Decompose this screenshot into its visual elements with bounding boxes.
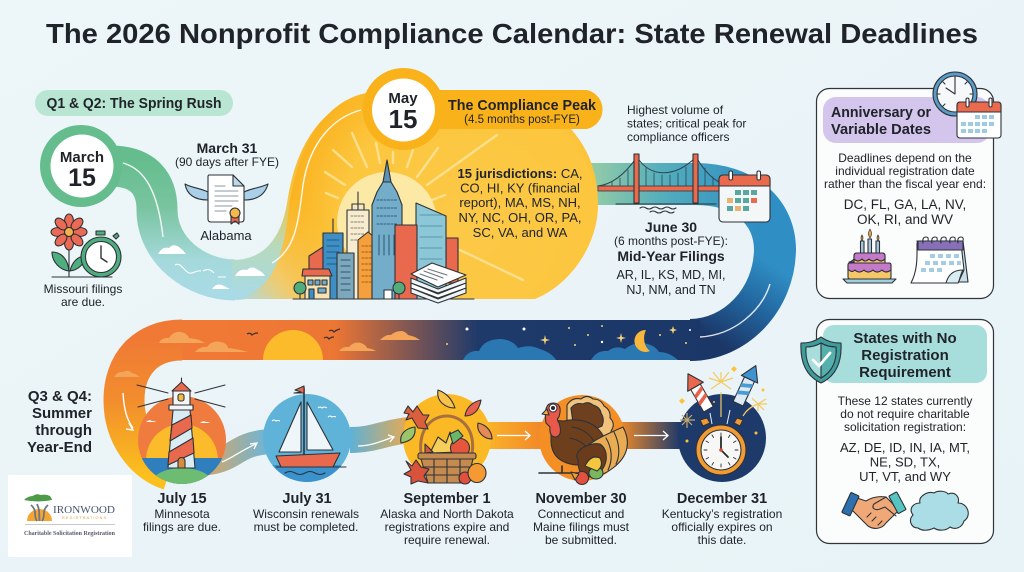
section label: Q1 and Q2 — [35, 90, 233, 116]
label: September 1 — [380, 491, 514, 547]
sun on horizon — [263, 330, 323, 360]
ribbon highlights — [123, 284, 770, 430]
illustration: new year clock and fireworks — [678, 362, 767, 482]
label: July 31: July 31 — [282, 491, 332, 507]
date badge: March 15: March — [60, 149, 104, 166]
panel heading: no registration: Requirement — [859, 364, 951, 381]
ribbon: June teal to blue — [585, 184, 775, 250]
label: November 30: Connecticut and — [538, 507, 624, 521]
connector: sailboat to basket — [350, 430, 410, 446]
text: 15 jurisdictions: CO, HI, KY (financial — [460, 180, 580, 196]
text: June 30 mid-year filings: Mid-Year Filings — [617, 248, 725, 264]
logo: Ironwood Registrations: IRONWOOD — [53, 504, 115, 516]
state list: variable dates: DC, FL, GA, LA, NV, — [844, 197, 966, 212]
icon: flower and stopwatch — [51, 214, 121, 277]
date badge: March 15 — [40, 125, 122, 207]
ribbon: left curve into lighthouse — [124, 340, 182, 470]
panel heading: no registration: States with No — [853, 330, 957, 347]
label: July 31: must be completed. — [254, 520, 358, 534]
label: November 30: November 30 — [535, 491, 627, 507]
text: 15 jurisdictions — [458, 166, 582, 240]
state list: no registration: UT, VT, and WY — [859, 469, 951, 484]
state list: variable dates: OK, RI, and WV — [857, 212, 953, 227]
icon: handshake — [842, 492, 906, 528]
peak heading pill: (4.5 months post-FYE) — [464, 114, 580, 126]
label: July 15: Minnesota — [154, 507, 210, 521]
logo: Ironwood Registrations: REGISTRATIONS — [62, 516, 106, 520]
body text: deadlines: individual registration date — [835, 164, 975, 178]
illustration: city skyline — [293, 160, 474, 303]
label: December 31: this date. — [698, 533, 746, 547]
text: highest volume note — [627, 103, 746, 144]
illustration: sailboat — [263, 386, 351, 482]
body text: deadlines — [824, 151, 986, 191]
body text: deadlines: rather than the fiscal year end: — [824, 177, 986, 191]
section label: Q3 and Q4: Q3 & Q4: — [28, 388, 92, 405]
illustration: golden gate bridge — [598, 154, 725, 213]
logo: Ironwood Registrations — [8, 475, 132, 557]
text: 15 jurisdictions: 15 jurisdictions: CA, — [458, 166, 582, 181]
panel heading: anniversary — [823, 97, 990, 143]
body text: no registration — [838, 394, 972, 434]
label: July 15: July 15 — [157, 491, 207, 507]
icon: flip calendar — [911, 237, 968, 283]
ribbon: day to night band — [175, 320, 700, 360]
label: December 31: Kentucky’s registration — [662, 507, 782, 521]
section label: Q3 and Q4 — [27, 388, 92, 456]
text: June 30 mid-year filings: AR, IL, KS, MD, MI, — [616, 268, 726, 282]
peak heading pill: The Compliance Peak — [448, 97, 597, 114]
panel heading: anniversary: Variable Dates — [831, 121, 931, 138]
label: September 1: registrations expire and — [385, 520, 509, 534]
text: 15 jurisdictions: NY, NC, OH, OR, PA, — [458, 210, 582, 225]
date badge: May 15: May — [388, 90, 418, 107]
panel heading: anniversary: Anniversary or — [831, 104, 931, 121]
panel: anniversary or variable dates — [816, 72, 1001, 298]
illustration: lighthouse — [136, 378, 226, 484]
label: July 31 — [253, 491, 359, 534]
label: November 30: Maine filings must — [533, 520, 630, 534]
connector: turkey to clock — [620, 422, 682, 449]
state list: no registration: NE, SD, TX, — [870, 454, 940, 470]
label: September 1: Alaska and North Dakota — [380, 507, 514, 521]
label: December 31 — [662, 491, 782, 547]
spring ribbon: March to valley — [110, 166, 235, 280]
label: March 31 Alabama date — [175, 140, 279, 169]
label: Missouri filings — [44, 282, 122, 309]
text: June 30 mid-year filings: June 30 — [645, 219, 697, 235]
spring ribbon highlights and clouds — [123, 110, 361, 289]
body text: deadlines: Deadlines depend on the — [838, 151, 972, 165]
label: November 30 — [533, 491, 630, 547]
section label: Q3 and Q4: Summer — [32, 405, 92, 422]
spring ribbon: valley rising to peak — [232, 112, 385, 280]
icon: shield with check — [801, 337, 841, 383]
label: September 1: September 1 — [403, 491, 491, 507]
icon: winged document — [185, 175, 268, 224]
date badge: March 15: 15 — [68, 164, 96, 192]
connector: lighthouse to sailboat — [205, 442, 265, 463]
label: November 30: be submitted. — [545, 533, 617, 547]
label: December 31: December 31 — [677, 491, 767, 507]
peak background shape — [230, 92, 598, 300]
text: June 30 mid-year filings: NJ, NM, and TN — [626, 283, 716, 297]
ribbon: right descending curve — [690, 248, 775, 340]
sky decorations — [114, 325, 691, 377]
date badge: May 15: 15 — [389, 104, 417, 134]
label: Missouri filings: are due. — [61, 295, 105, 309]
panel heading: no registration: Registration — [861, 347, 949, 364]
body text: no registration: These 12 states currently — [838, 394, 972, 408]
illustration: autumn harvest basket — [401, 390, 492, 484]
label: July 15 — [143, 491, 221, 534]
label: December 31: officially expires on — [671, 520, 773, 534]
text: 15 jurisdictions: report), MA, MS, NH, — [459, 195, 581, 210]
date badge: May 15 — [362, 68, 444, 150]
section label: Q3 and Q4: Year-End — [27, 439, 92, 456]
label: July 15: filings are due. — [143, 520, 221, 534]
icon: cloud — [911, 491, 968, 530]
text: June 30 mid-year filings: (6 months post-FYE): — [614, 234, 728, 248]
icon: clock — [933, 72, 977, 116]
illustration: turkey and cornucopia — [539, 395, 627, 484]
logo: Ironwood Registrations: Charitable Solicitation Registration — [24, 530, 115, 537]
section label: Q3 and Q4: through — [35, 422, 92, 439]
text: 15 jurisdictions: SC, VA, and WA — [473, 225, 568, 240]
icon: calendar — [957, 98, 1001, 138]
panel: states with no registration requirement — [801, 320, 994, 544]
state list: no registration: AZ, DE, ID, IN, IA, MT, — [840, 440, 970, 455]
label: September 1: require renewal. — [404, 533, 490, 547]
sun rays — [325, 133, 523, 280]
state list: no registration — [840, 440, 970, 484]
text: highest volume note: states; critical peak for — [627, 116, 746, 130]
section label: Q1 and Q2: Q1 & Q2: The Spring Rush — [46, 96, 222, 112]
label: March 31 Alabama date: March 31 — [197, 140, 258, 156]
label: March 31 Alabama date: (90 days after FYE) — [175, 155, 279, 169]
title: The 2026 Nonprofit Compliance Calendar: State Renewal Deadlines — [46, 18, 978, 49]
icon: birthday cake — [843, 229, 896, 283]
icon: calendar at June 30 — [719, 171, 770, 222]
panel heading: no registration — [823, 325, 987, 383]
label: July 31: Wisconsin renewals — [253, 507, 359, 521]
connector: basket to turkey — [488, 422, 544, 449]
sun disc — [337, 172, 437, 272]
text: June 30 mid-year filings — [614, 219, 728, 297]
body text: no registration: solicitation registration: — [844, 420, 966, 434]
peak heading pill — [405, 90, 603, 129]
text: highest volume note: Highest volume of — [627, 103, 724, 117]
body text: no registration: do not require charitable — [840, 407, 970, 421]
text: highest volume note: compliance officers — [627, 130, 730, 144]
label: Alabama: Alabama — [200, 228, 252, 243]
state list: variable dates — [844, 197, 966, 227]
label: Missouri filings: Missouri filings — [44, 282, 122, 296]
